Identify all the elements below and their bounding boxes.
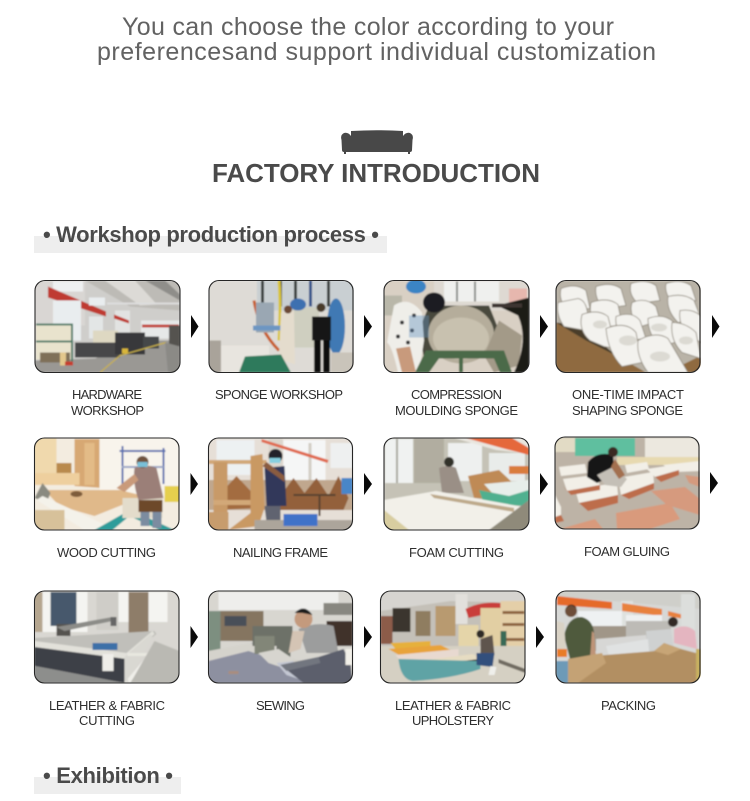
arrow [190, 473, 198, 495]
caption: one-time impact shaping sponge: SHAPING SPONGE [572, 403, 683, 418]
photo: leather and fabric cutting [34, 591, 180, 683]
caption: wood cutting: WOOD CUTTING [57, 545, 156, 560]
photo: foam cutting [384, 438, 529, 530]
arrow [710, 472, 718, 494]
caption: compression moulding sponge: MOULDING SPONGE [395, 403, 518, 418]
photo: wood cutting [34, 438, 180, 530]
caption: one-time impact shaping sponge [572, 387, 684, 418]
arrow [191, 315, 198, 338]
caption: leather and fabric upholstery: LEATHER & FABRIC [395, 698, 511, 713]
caption: leather and fabric upholstery: UPHOLSTERY [412, 713, 494, 728]
caption: foam cutting: FOAM CUTTING [409, 545, 504, 560]
intro text: colour customization: You can choose the color according to your [122, 13, 614, 41]
photo: leather and fabric upholstery [380, 591, 526, 683]
intro text: colour customization: preferencesand support individual customization [97, 38, 656, 66]
caption: foam gluing: FOAM GLUING [584, 544, 670, 559]
intro text: colour customization [97, 13, 656, 66]
photo: compression moulding sponge [384, 280, 529, 372]
photo: sponge workshop [209, 280, 354, 372]
caption: hardware workshop [71, 387, 144, 418]
photo: foam gluing [555, 437, 700, 529]
caption: sewing: SEWING [256, 698, 305, 713]
caption: compression moulding sponge [395, 387, 518, 418]
caption: hardware workshop: WORKSHOP [71, 403, 144, 418]
arrow [364, 626, 372, 648]
photo: hardware workshop [35, 280, 180, 372]
photo: packing [556, 591, 701, 683]
caption: hardware workshop: HARDWARE [72, 387, 142, 402]
caption: leather and fabric cutting [49, 698, 165, 728]
heading: factory introduction: FACTORY INTRODUCTION [212, 158, 540, 188]
section heading: exhibition: • Exhibition • [43, 763, 173, 788]
caption: compression moulding sponge: COMPRESSION [411, 387, 502, 402]
caption: one-time impact shaping sponge: ONE-TIME IMPACT [572, 387, 684, 402]
caption: nailing frame: NAILING FRAME [233, 545, 328, 560]
icon: sofa [341, 130, 413, 154]
caption: leather and fabric cutting: LEATHER & FABRIC [49, 698, 165, 713]
arrow [364, 315, 372, 338]
caption: sponge workshop: SPONGE WORKSHOP [215, 387, 343, 402]
arrow [364, 473, 372, 495]
caption: leather and fabric upholstery [395, 698, 511, 728]
arrow [540, 473, 548, 495]
caption: leather and fabric cutting: CUTTING [79, 713, 135, 728]
photo: sewing [208, 591, 352, 683]
photo: one-time impact shaping sponge [556, 280, 701, 372]
arrow [190, 626, 198, 648]
arrow [712, 315, 720, 338]
arrow [536, 626, 544, 648]
arrow [540, 315, 548, 338]
caption: packing: PACKING [601, 698, 656, 713]
photo: nailing frame [208, 438, 352, 530]
section heading: workshop production process: • Workshop production process • [43, 222, 379, 247]
